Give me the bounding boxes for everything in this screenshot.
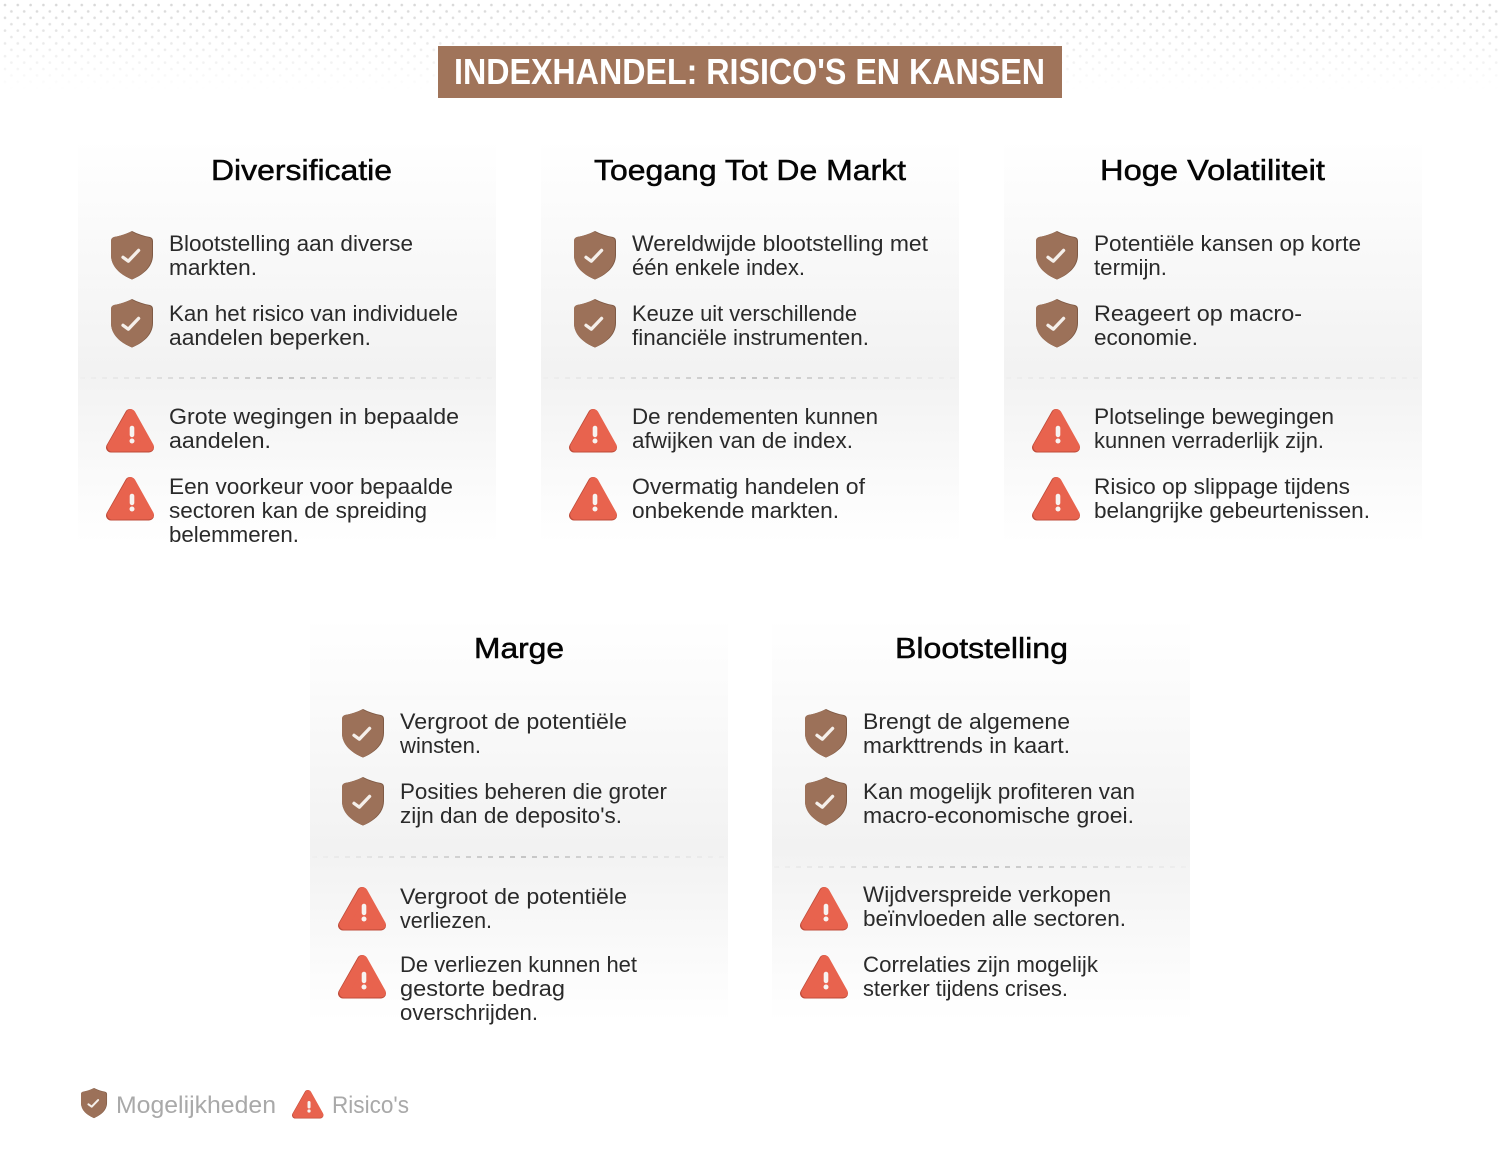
icon: warning (805, 960, 843, 994)
icon: shield (805, 777, 847, 826)
text: risk 2: De verliezen kunnen het (400, 952, 637, 977)
icon: warning (1037, 482, 1075, 516)
icon: shield (1036, 299, 1078, 348)
icon: legend warning (295, 1093, 320, 1115)
text: opportunity 2: Reageert op macro- (1094, 301, 1302, 326)
text: risk 2: belangrijke gebeurtenissen. (1094, 498, 1370, 523)
panel: Marge (310, 618, 728, 1038)
icon: shield (805, 709, 847, 758)
text: risk 2: onbekende markten. (632, 498, 839, 523)
text: risk 2: sectoren kan de spreiding (169, 498, 427, 523)
icon: shield (1036, 231, 1078, 280)
text: risk 2 (400, 952, 637, 1025)
text: risk 1 (169, 404, 459, 453)
text: risk 2: Een voorkeur voor bepaalde (169, 474, 453, 499)
text: opportunity 2 (1094, 301, 1302, 350)
icon: shield (574, 231, 616, 280)
text: opportunity 1: winsten. (399, 733, 481, 758)
text: risk 1: Plotselinge bewegingen (1094, 404, 1334, 429)
text: risk 2: sterker tijdens crises. (863, 976, 1068, 1001)
text: risk 2: overschrijden. (400, 1000, 538, 1025)
panel: Toegang Tot De Markt (541, 140, 959, 560)
text: opportunity 1: Vergroot de potentiële (400, 709, 627, 734)
text: opportunity 2 (632, 301, 869, 350)
text: risk 1 (400, 884, 627, 933)
heading: Blootstelling: Blootstelling (895, 633, 1068, 665)
text: risk 2: belemmeren. (169, 522, 299, 547)
text: opportunity 1: één enkele index. (632, 255, 805, 280)
text: risk 2 (632, 474, 866, 523)
text: opportunity 1: Wereldwijde blootstelling met (632, 231, 928, 256)
panel: Blootstelling (772, 618, 1190, 1038)
heading: Hoge Volatiliteit: Hoge Volatiliteit (1100, 155, 1325, 187)
text: opportunity 1 (169, 231, 413, 280)
text: opportunity 2: Posities beheren die groter (400, 779, 667, 804)
text: opportunity 1: Potentiële kansen op korte (1094, 231, 1361, 256)
text: opportunity 2 (863, 779, 1135, 828)
icon: shield (111, 231, 153, 280)
heading: Diversificatie: Diversificatie (211, 155, 392, 187)
heading: Toegang Tot De Markt: Toegang Tot De Markt (594, 155, 906, 187)
text: risk 1: afwijken van de index. (632, 428, 853, 453)
legend label: Mogelijkheden: Mogelijkheden (116, 1092, 276, 1119)
text: opportunity 1: termijn. (1094, 255, 1167, 280)
icon: warning (111, 482, 149, 516)
panel: Diversificatie (78, 140, 496, 560)
text: opportunity 2: aandelen beperken. (169, 325, 371, 350)
text: risk 1 (863, 882, 1126, 931)
text: opportunity 1 (863, 709, 1070, 758)
panel: Hoge Volatiliteit (1004, 140, 1422, 560)
text: opportunity 2 (400, 779, 667, 828)
icon: shield (574, 299, 616, 348)
text: risk 1: beïnvloeden alle sectoren. (863, 906, 1126, 931)
icon: shield (342, 777, 384, 826)
icon: warning (343, 892, 381, 926)
text: risk 1: Vergroot de potentiële (400, 884, 627, 909)
text: opportunity 2: Kan mogelijk profiteren van (863, 779, 1135, 804)
text: opportunity 2: economie. (1094, 325, 1198, 350)
text: opportunity 1 (399, 709, 627, 758)
text: opportunity 1 (632, 231, 928, 280)
icon: warning (805, 892, 843, 926)
text: risk 2: Overmatig handelen of (632, 474, 866, 499)
text: opportunity 1: markten. (169, 255, 257, 280)
text: opportunity 2: macro-economische groei. (863, 803, 1134, 828)
text: risk 1: Wijdverspreide verkopen (863, 882, 1111, 907)
icon: shield (111, 299, 153, 348)
icon: warning (1037, 414, 1075, 448)
title: INDEXHANDEL: RISICO'S EN KANSEN (454, 51, 1045, 92)
background dot pattern (0, 0, 1500, 90)
text: opportunity 2: Kan het risico van individuele (169, 301, 458, 326)
text: risk 1: Grote wegingen in bepaalde (169, 404, 459, 429)
icon: warning (574, 414, 612, 448)
icon: warning (343, 960, 381, 994)
text: risk 1: kunnen verraderlijk zijn. (1094, 428, 1324, 453)
text: opportunity 2: financiële instrumenten. (632, 325, 869, 350)
text: opportunity 1: markttrends in kaart. (863, 733, 1070, 758)
text: opportunity 2: Keuze uit verschillende (632, 301, 857, 326)
heading: Marge: Marge (474, 633, 564, 665)
legend (81, 1088, 409, 1119)
text: opportunity 1: Blootstelling aan diverse (169, 231, 413, 256)
text: risk 1: verliezen. (400, 908, 492, 933)
icon: warning (574, 482, 612, 516)
text: opportunity 2: zijn dan de deposito's. (400, 803, 622, 828)
text: risk 1: aandelen. (169, 428, 271, 453)
text: risk 1 (632, 404, 878, 453)
text: risk 2: Correlaties zijn mogelijk (863, 952, 1099, 977)
text: opportunity 2 (169, 301, 458, 350)
text: risk 2 (863, 952, 1099, 1001)
text: risk 1: De rendementen kunnen (632, 404, 878, 429)
text: risk 2: Risico op slippage tijdens (1094, 474, 1350, 499)
text: opportunity 1 (1094, 231, 1361, 280)
icon: shield (342, 709, 384, 758)
text: risk 1 (1094, 404, 1334, 453)
text: risk 2: gestorte bedrag (400, 976, 565, 1001)
icon: legend shield (81, 1088, 107, 1118)
legend label: Risico's: Risico's (332, 1092, 409, 1119)
text: risk 2 (1094, 474, 1370, 523)
text: opportunity 1: Brengt de algemene (863, 709, 1070, 734)
icon: warning (111, 414, 149, 448)
text: risk 2 (169, 474, 453, 547)
